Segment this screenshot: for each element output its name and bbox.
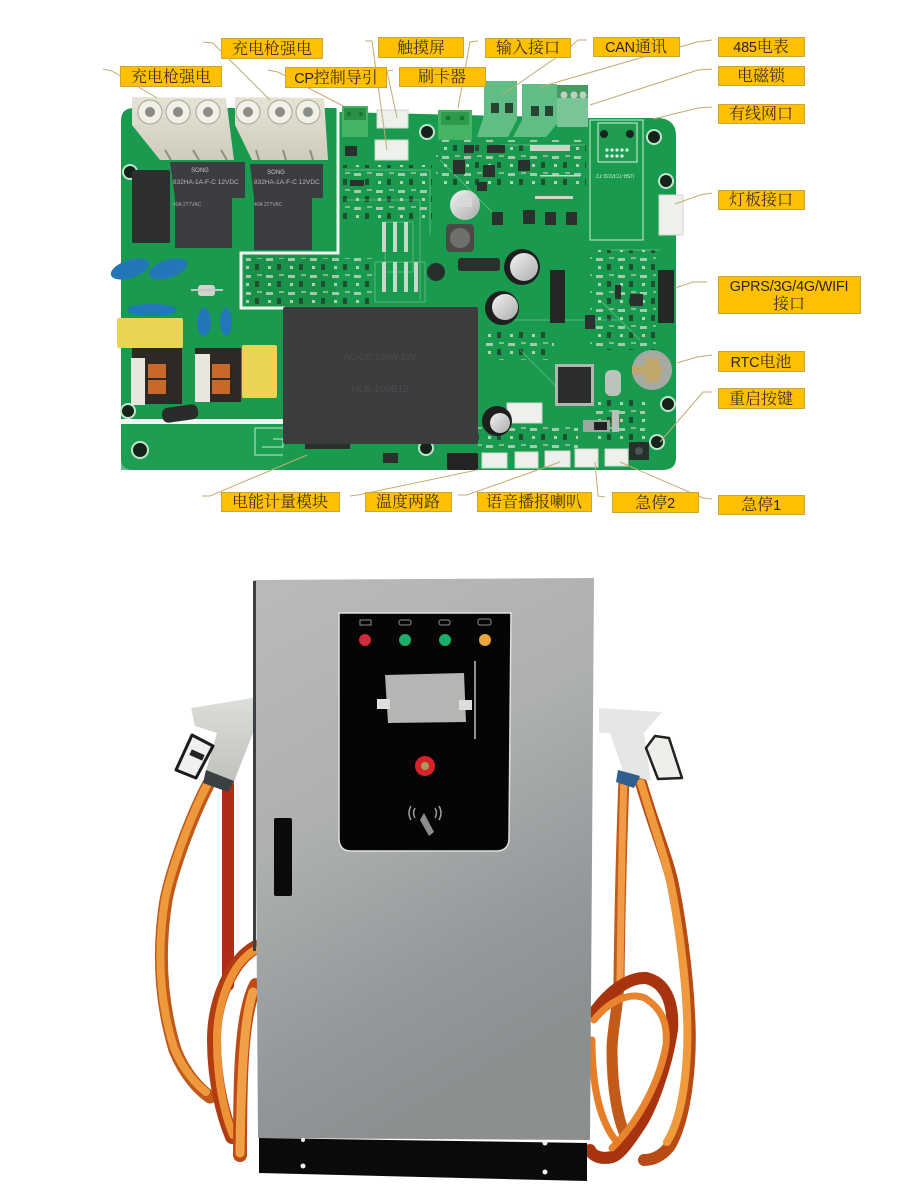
network module outline — [590, 120, 643, 240]
label: touch screen — [378, 38, 464, 58]
label: magnetic lock — [718, 66, 804, 86]
cabinet body — [254, 578, 594, 1140]
label: input port — [486, 38, 570, 58]
power module: AC-DC 100W 12V — [343, 352, 417, 362]
left cables — [160, 780, 256, 1155]
relay 1: 832HA-1A-F-C 12VDC — [173, 179, 239, 186]
label: temperature — [366, 492, 452, 512]
relay 1: SONG — [191, 168, 209, 174]
label: wired network — [718, 104, 804, 124]
right cables — [590, 778, 690, 1160]
slide switch — [583, 410, 619, 432]
isolation strips — [121, 108, 338, 470]
label: gun power 1 — [120, 66, 222, 86]
label: energy meter: 电能计量模块 — [232, 492, 328, 511]
panel: charging station photo — [160, 578, 690, 1181]
door handle slot — [274, 818, 292, 896]
circuit traces — [345, 145, 660, 390]
relay 2: 832HA-1A-F-C 12VDC — [254, 179, 320, 186]
label: 485 meter — [718, 37, 804, 56]
power module: HLK-100B12 — [351, 384, 409, 395]
resistor — [161, 404, 199, 423]
yellow capacitors — [117, 318, 277, 398]
label: RTC battery — [718, 352, 804, 372]
transistor — [458, 258, 500, 271]
label: speaker: 语音播报喇叭 — [486, 492, 582, 511]
label: GPRS: 接口 — [773, 295, 805, 313]
green connector: input — [477, 81, 517, 137]
green connector: lock — [557, 85, 588, 127]
label: emergency stop 1 — [718, 496, 804, 514]
indicator lamp red — [359, 634, 371, 646]
label: touch screen: 触摸屏 — [397, 38, 445, 57]
reset button — [629, 442, 649, 460]
cabinet base — [259, 1138, 587, 1181]
green connector: CAN — [513, 84, 557, 137]
relay 2: 40A 277VAC — [254, 202, 283, 208]
panel: circuit board photo — [108, 81, 683, 470]
microcontroller — [555, 364, 594, 406]
label: GPRS: GPRS/3G/4G/WIFI — [730, 279, 848, 295]
control panel — [339, 613, 511, 851]
label: reset button: 重启按键 — [729, 390, 793, 408]
label: RTC battery: RTC电池 — [731, 353, 791, 371]
label: emergency stop 2 — [612, 492, 698, 512]
cabinet left edge — [253, 581, 256, 951]
component density zones — [246, 140, 656, 450]
mounting holes — [121, 125, 675, 458]
label: gun power 2: 充电枪强电 — [232, 40, 312, 58]
indicator lamp green — [399, 634, 411, 646]
surface-mount chips — [345, 145, 643, 463]
label: GPRS — [718, 276, 860, 314]
callout leader lines — [103, 40, 712, 499]
label: light board: 灯板接口 — [729, 191, 793, 209]
indicator lamp green 2 — [439, 634, 451, 646]
right charging gun — [599, 708, 682, 788]
white connectors — [375, 110, 683, 468]
label: reset button — [718, 388, 804, 408]
screen — [377, 673, 472, 723]
label: CP pilot: CP控制导引 — [294, 69, 378, 87]
fuse holder — [132, 170, 170, 243]
label: gun power 2 — [222, 38, 322, 58]
common-mode inductor 1 — [131, 348, 182, 405]
power module — [283, 307, 478, 449]
emergency stop button — [415, 756, 435, 776]
pin headers — [550, 270, 674, 323]
label: magnetic lock: 电磁锁 — [737, 66, 786, 85]
label: 485 meter: 485电表 — [733, 37, 789, 56]
label: card reader: 刷卡器 — [418, 68, 466, 86]
status icons — [360, 619, 491, 625]
small diode — [191, 285, 223, 296]
black connector — [447, 453, 478, 470]
silkscreen solder pads — [382, 145, 580, 292]
label: gun power 1: 充电枪强电 — [131, 68, 211, 86]
label: CAN — [594, 38, 680, 56]
blue capacitors — [108, 254, 232, 336]
power inductor — [446, 224, 474, 252]
label: temperature: 温度两路 — [376, 493, 440, 511]
relay 1 — [170, 162, 245, 248]
label: emergency stop 1: 急停1 — [741, 496, 781, 514]
terminal block 1 — [132, 97, 234, 160]
label: card reader — [400, 68, 486, 86]
label: light board — [718, 190, 804, 210]
relay 2 — [250, 164, 323, 250]
green connector: card reader — [438, 110, 472, 140]
buzzer — [450, 190, 480, 220]
RTC battery holder — [632, 350, 672, 390]
board substrate — [121, 108, 676, 470]
relay 1: 40A 277VAC — [173, 202, 202, 208]
terminal block 2 — [235, 97, 328, 160]
green connector: CP — [342, 106, 368, 137]
crystal — [605, 370, 621, 396]
indicator lamp yellow — [479, 634, 491, 646]
label: emergency stop 2: 急停2 — [635, 494, 675, 512]
label: CAN: CAN通讯 — [605, 38, 667, 56]
common-mode inductor 2 — [195, 348, 241, 402]
NFC card icon — [409, 806, 441, 836]
network module outline: USR-TCP232-T2 — [596, 172, 634, 178]
label: input port: 输入接口 — [496, 39, 560, 57]
vertical light strip — [474, 661, 476, 739]
left charging gun — [176, 698, 253, 792]
relay 2: SONG — [267, 170, 285, 176]
label: wired network: 有线网口 — [729, 105, 793, 123]
electrolytic capacitors — [427, 249, 540, 436]
